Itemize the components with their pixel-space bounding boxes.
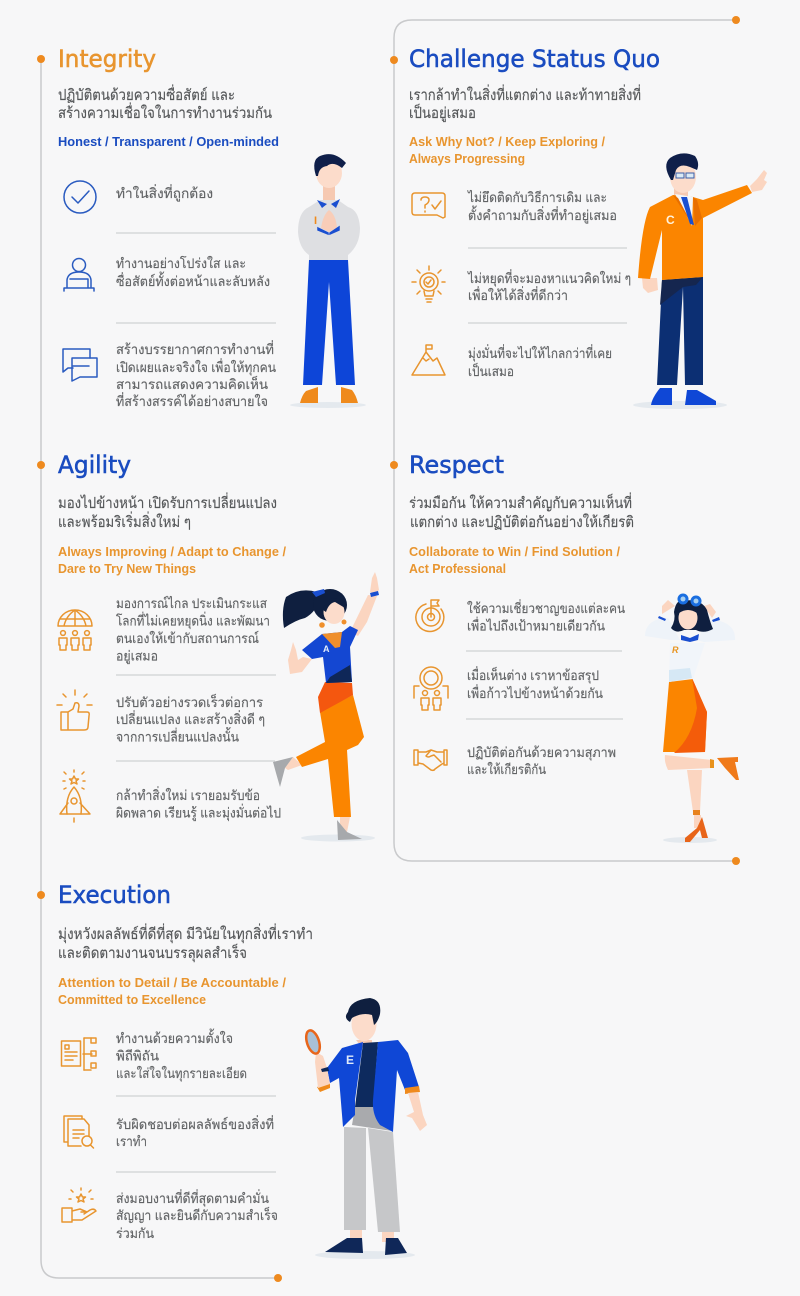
item text: excellence [116, 1189, 278, 1241]
left timeline connector [37, 55, 282, 1282]
character: Execution man: E [346, 1053, 354, 1067]
item text: question: ไม่ยึดติดกับวิธีการเดิม และ [467, 190, 607, 205]
item text: agree: เมื่อเห็นต่าง เราหาข้อสรุป [467, 666, 599, 684]
item text: foresight: ตนเองให้เข้ากับสถานการณ์ [116, 630, 259, 646]
item text: attention: และใส่ใจในทุกรายละเอียด [116, 1065, 247, 1082]
heading: Integrity: Integrity [58, 45, 156, 73]
icon: document checklist [62, 1038, 96, 1070]
item text: do right: ทำในสิ่งที่ถูกต้อง [116, 184, 213, 202]
description: Challenge: เป็นอยู่เสมอ [409, 103, 476, 122]
item text: go further: เป็นเสมอ [468, 362, 514, 379]
description: Integrity [58, 84, 272, 122]
icon: handshake [414, 750, 447, 770]
description: Agility [58, 492, 277, 531]
description: Respect: ร่วมมือกัน ให้ความสำคัญกับความเห็นที่ [409, 492, 632, 512]
character: Challenge man [633, 153, 767, 409]
icon: thumbs up [57, 690, 92, 730]
icon: mountain flag [412, 345, 445, 375]
icon: globe and people [58, 610, 92, 650]
item text: transparent: ทำงานอย่างโปร่งใส และ [116, 255, 246, 271]
heading: Agility: Agility [58, 451, 131, 479]
item text: open atmosphere: สามารถแสดงความคิดเห็น [116, 375, 268, 392]
item text: question [467, 190, 617, 224]
icon: documents and magnifier [64, 1116, 94, 1148]
description: Challenge [409, 84, 641, 122]
keywords: Integrity: Honest / Transparent / Open-minded [58, 135, 279, 149]
item text: accountable: เราทำ [116, 1134, 147, 1149]
item text: excellence: ส่งมอบงานที่ดีที่สุดตามคำมั่น [116, 1189, 269, 1207]
item text: accountable: รับผิดชอบต่อผลลัพธ์ของสิ่งที่ [116, 1115, 274, 1132]
item text: go further [468, 344, 612, 379]
description: Integrity: ปฏิบัติตนด้วยความซื่อสัตย์ และ [58, 84, 235, 104]
keywords: Respect: Collaborate to Win / Find Solution / [409, 545, 621, 559]
item text: adapt: จากการเปลี่ยนแปลงนั้น [116, 726, 239, 744]
item text: foresight: โลกที่ไม่เคยหยุดนิ่ง และพัฒนา [116, 612, 270, 630]
character: Respect woman [645, 594, 739, 843]
item text: adapt: ปรับตัวอย่างรวดเร็วต่อการ [116, 693, 263, 710]
item text: open atmosphere [116, 340, 276, 409]
item text: dare [116, 786, 281, 822]
item text: open atmosphere: สร้างบรรยากาศการทำงานที่ [116, 340, 274, 357]
description: Execution: มุ่งหวังผลลัพธ์ที่ดีที่สุด มีวินัยในทุกสิ่งที่เราทำ [58, 923, 313, 944]
character: Respect woman: R [672, 645, 679, 655]
item text: question: ตั้งคำถามกับสิ่งที่ทำอยู่เสมอ [468, 205, 617, 224]
item text: transparent [116, 255, 270, 289]
panel: Execution [58, 881, 427, 1259]
item text: polite: และให้เกียรติกัน [467, 761, 546, 777]
keywords: Agility: Dare to Try New Things [58, 562, 196, 576]
description: Agility: มองไปข้างหน้า เปิดรับการเปลี่ยนแปลง [58, 492, 277, 512]
keywords: Agility: Always Improving / Adapt to Change / [58, 545, 287, 559]
item text: attention [116, 1028, 247, 1082]
character: Integrity man [290, 154, 366, 408]
panel: Agility [57, 451, 379, 842]
description: Execution: และติดตามงานจนบรรลุผลสำเร็จ [58, 943, 247, 963]
item text: expertise: เพื่อไปถึงเป้าหมายเดียวกัน [467, 616, 605, 634]
right timeline connector [390, 16, 740, 865]
heading: Execution: Execution [58, 881, 171, 909]
item text: accountable [116, 1115, 274, 1149]
panel: Integrity [58, 45, 366, 409]
character: Execution man [304, 998, 427, 1259]
description: Challenge: เรากล้าทำในสิ่งที่แตกต่าง และท้าทายสิ่งที่ [409, 84, 641, 104]
item text: dare: ผิดพลาด เรียนรู้ และมุ่งมั่นต่อไป [116, 804, 281, 822]
icon: fist and two people [414, 667, 448, 710]
item text: new ideas: ไม่หยุดที่จะมองหาแนวคิดใหม่ ๆ [467, 269, 631, 287]
description: Execution [58, 923, 313, 963]
description: Respect: แตกต่าง และปฏิบัติต่อกันอย่างให้เกียรติ [410, 513, 634, 531]
keywords: Execution [58, 976, 287, 1007]
icon: light bulb [412, 266, 445, 302]
character: Challenge man: C [666, 213, 675, 227]
item text: polite: ปฏิบัติต่อกันด้วยความสุภาพ [467, 745, 616, 761]
icon: question bubble [412, 193, 445, 218]
character: Agility woman [273, 572, 379, 842]
item text: foresight: อยู่เสมอ [116, 648, 158, 664]
panel: Challenge Status Quo [409, 45, 767, 409]
item text: polite [467, 745, 616, 777]
keywords: Agility [58, 545, 287, 576]
character: Agility woman: A [323, 644, 330, 654]
item text: attention: พิถีพิถัน [116, 1048, 159, 1064]
keywords: Respect [409, 545, 621, 576]
character: Integrity man: I [314, 215, 317, 227]
description: Integrity: สร้างความเชื่อใจในการทำงานร่วมกัน [58, 102, 272, 122]
item text: foresight: มองการณ์ไกล ประเมินกระแส [116, 595, 267, 611]
icon: person at laptop [64, 258, 94, 291]
icon: speech bubbles [63, 349, 97, 381]
item text: adapt: เปลี่ยนแปลง และสร้างสิ่งดี ๆ [116, 710, 265, 727]
item text: open atmosphere: ที่สร้างสรรค์ได้อย่างสบายใจ [116, 392, 268, 409]
item text: agree [467, 666, 603, 701]
keywords: Challenge: Ask Why Not? / Keep Exploring / [409, 135, 606, 149]
heading: Respect: Respect [409, 451, 504, 479]
keywords: Execution: Committed to Excellence [58, 993, 206, 1007]
keywords: Respect: Act Professional [409, 562, 506, 576]
item text: excellence: ร่วมกัน [116, 1226, 154, 1241]
item text: open atmosphere: เปิดเผยและจริงใจ เพื่อให้ทุกคน [116, 358, 276, 376]
item text: transparent: ซื่อสัตย์ทั้งต่อหน้าและลับหลัง [116, 271, 270, 289]
icon: hand with star [62, 1188, 96, 1222]
item text: attention: ทำงานด้วยความตั้งใจ [116, 1028, 233, 1046]
icon: rocket and star [60, 770, 90, 822]
item text: new ideas [467, 269, 631, 303]
keywords: Challenge [409, 135, 606, 166]
item text: expertise [467, 599, 625, 634]
description: Respect [409, 492, 634, 531]
item text: foresight [116, 595, 270, 664]
item text: adapt [116, 693, 265, 744]
icon: target and flag [416, 600, 444, 631]
description: Agility: และพร้อมริเริ่มสิ่งใหม่ ๆ [58, 511, 191, 531]
icon: check circle [64, 181, 96, 213]
keywords: Challenge: Always Progressing [409, 152, 525, 166]
panel: Respect [409, 451, 739, 843]
item text: dare: กล้าทำสิ่งใหม่ เรายอมรับข้อ [116, 786, 260, 803]
item text: agree: เพื่อก้าวไปข้างหน้าด้วยกัน [467, 684, 603, 701]
heading: Challenge Status Quo: Challenge Status Quo [409, 45, 660, 73]
item text: excellence: สัญญา และยินดีกับความสำเร็จ [116, 1206, 278, 1223]
item text: go further: มุ่งมั่นที่จะไปให้ไกลกว่าที่เคย [468, 344, 612, 362]
keywords: Execution: Attention to Detail / Be Accountable / [58, 976, 287, 990]
item text: new ideas: เพื่อให้ได้สิ่งที่ดีกว่า [468, 286, 568, 303]
item text: expertise: ใช้ความเชี่ยวชาญของแต่ละคน [467, 599, 625, 616]
